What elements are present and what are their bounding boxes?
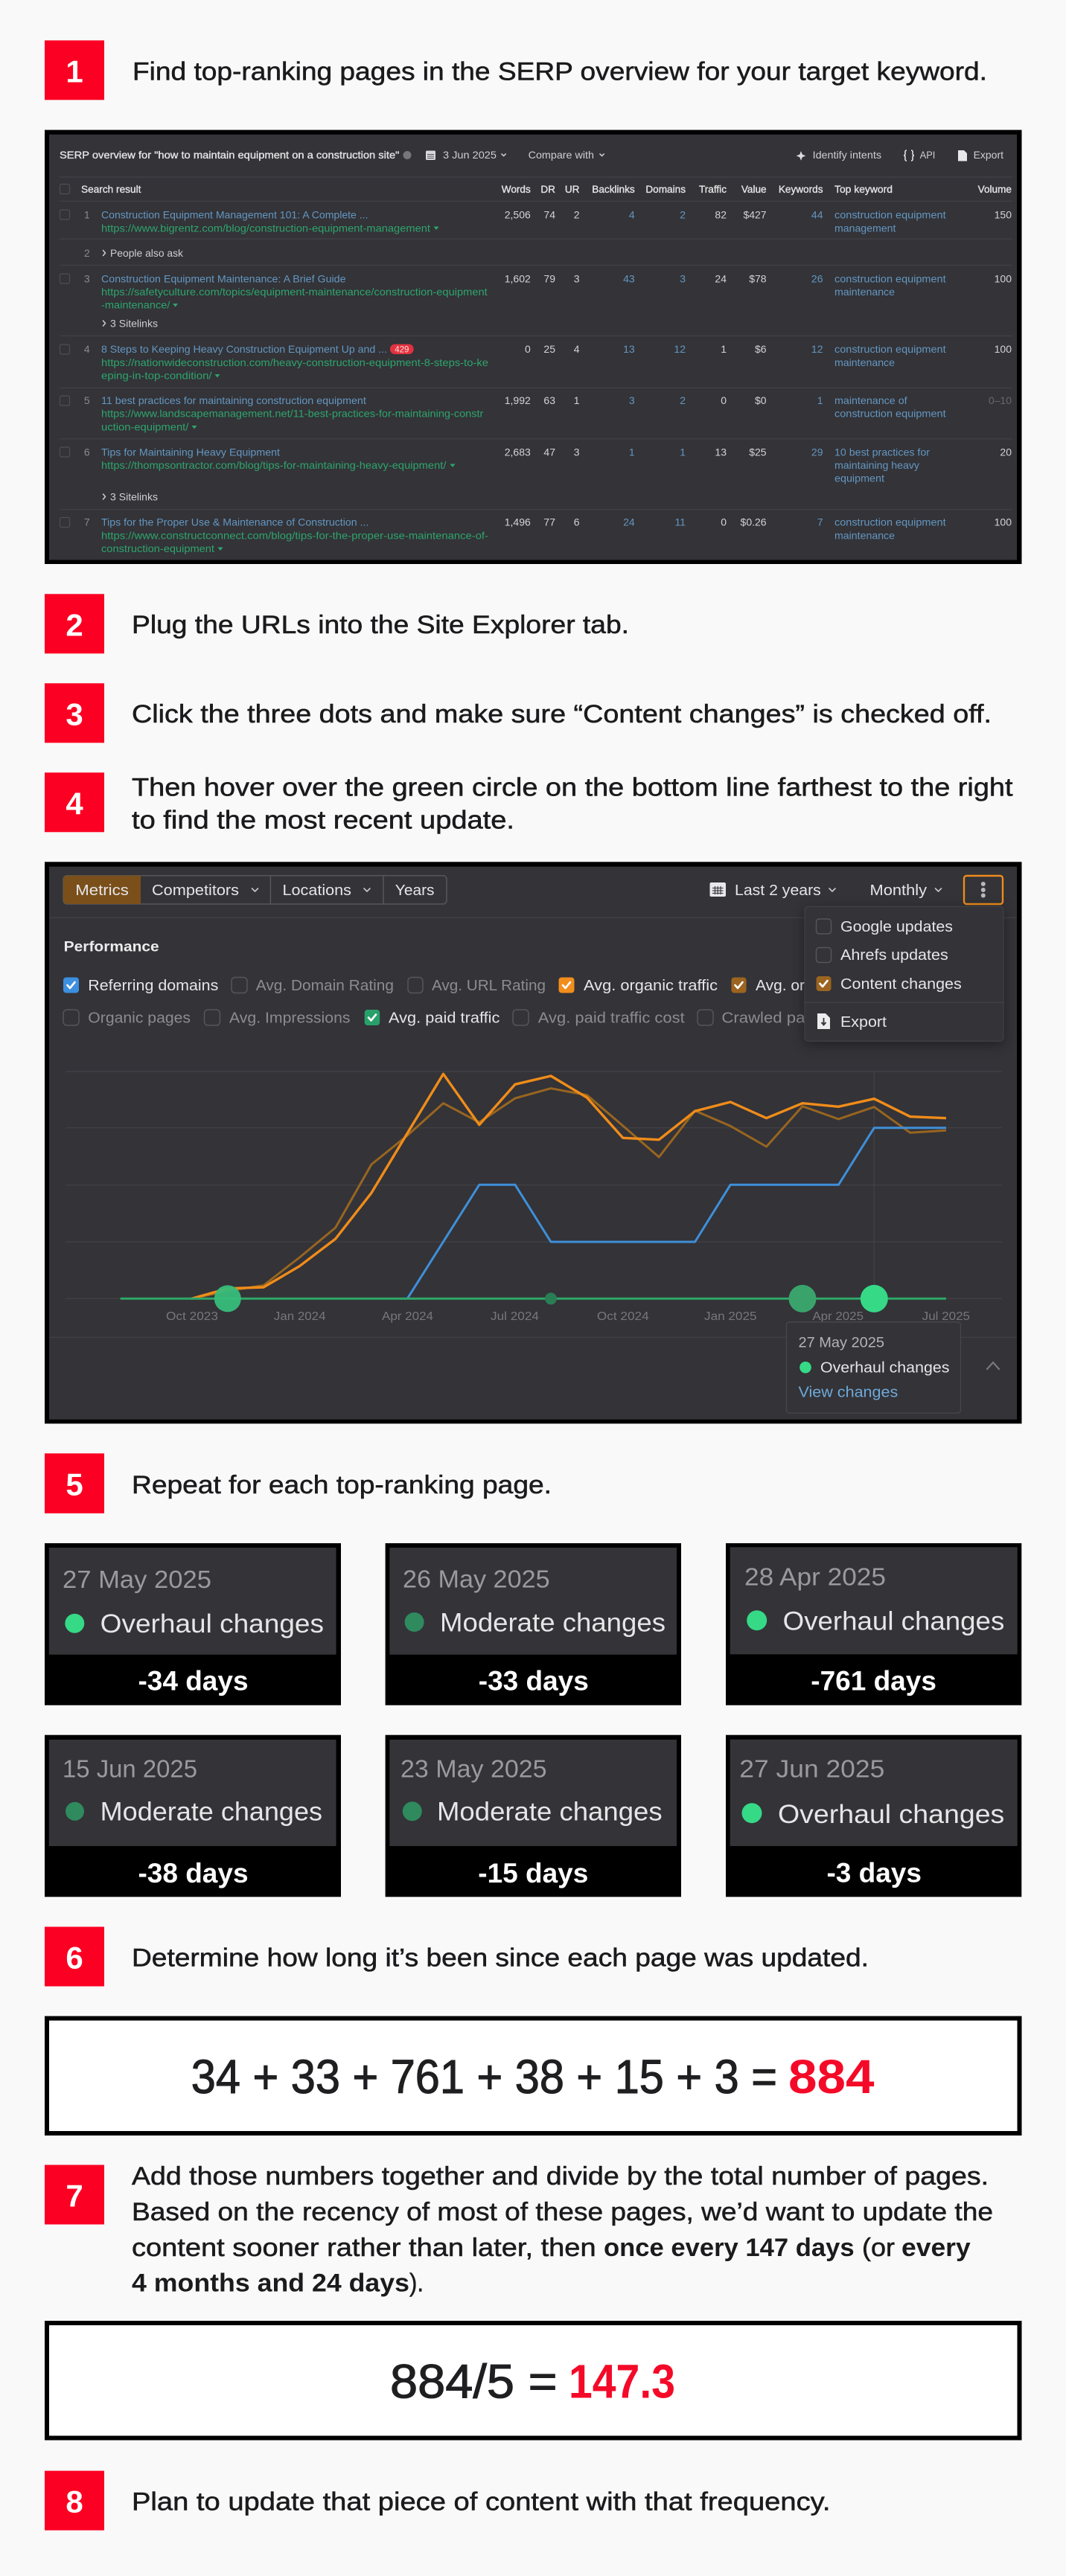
SERP row 3: 43 bbox=[623, 272, 635, 284]
tabs bbox=[63, 876, 447, 904]
equation box: average: 147.3 bbox=[569, 2354, 675, 2408]
card: 27 May 2025 bbox=[45, 1543, 341, 1705]
step 6 bbox=[45, 1927, 869, 1987]
SERP row 7: 0 bbox=[721, 516, 727, 528]
SERP row 3: 3 bbox=[680, 272, 686, 284]
SERP row 4: 0 bbox=[525, 343, 531, 355]
SERP table header: Search result bbox=[81, 183, 141, 195]
equation box: sum of days: 34 + 33 + 761 + 38 + 15 + 3 = bbox=[191, 2050, 777, 2104]
SERP row 3: 3 bbox=[84, 272, 90, 284]
metric checkboxes: Avg. paid traffic bbox=[389, 1010, 500, 1027]
card: 23 May 2025: -15 days bbox=[478, 1858, 588, 1888]
SERP table header: Value bbox=[741, 184, 767, 195]
SERP row 4 bbox=[60, 343, 1012, 382]
metric checkboxes: Avg. Impressions bbox=[229, 1010, 350, 1027]
metric checkboxes: Avg. or bbox=[756, 978, 805, 994]
SERP row 6: 1 bbox=[680, 446, 686, 458]
tabs: Locations bbox=[283, 882, 351, 899]
x axis labels: Oct 2023 bbox=[166, 1310, 218, 1323]
step 4 bbox=[45, 772, 1013, 834]
green line: paid traffic bbox=[121, 1298, 946, 1300]
equation box: average bbox=[47, 2323, 1020, 2438]
step 7 text: every bbox=[901, 2234, 971, 2262]
metric checkboxes: Avg. organic traffic bbox=[584, 978, 718, 994]
SERP table header: Backlinks bbox=[592, 184, 635, 195]
SERP table header bbox=[60, 183, 1012, 195]
SERP row 7: 11 bbox=[674, 516, 686, 528]
SERP row 5: 5 bbox=[84, 394, 90, 406]
orange line: avg organic traffic bbox=[191, 1074, 946, 1298]
SERP row 1 bbox=[60, 208, 1012, 234]
SERP row 6 bbox=[60, 446, 1012, 503]
date range controls: Last 2 years bbox=[735, 882, 821, 899]
Performance heading: Performance bbox=[64, 939, 159, 955]
SERP row 4: 13 bbox=[623, 343, 635, 355]
step 2 number badge: 2 bbox=[66, 607, 83, 642]
SERP row 4: maintenance bbox=[834, 356, 895, 368]
SERP row 4: 429 bbox=[395, 345, 409, 354]
content change markers bbox=[214, 1285, 888, 1313]
panel: SERP overview screenshot bbox=[45, 130, 1021, 564]
SERP row 7: $0.26 bbox=[741, 516, 767, 528]
SERP row 4: $6 bbox=[755, 343, 767, 355]
SERP row 3: -maintenance/ bbox=[101, 299, 170, 311]
SERP row 4: eping-in-top-condition/ bbox=[101, 370, 212, 382]
SERP row 4: 1 bbox=[721, 343, 727, 355]
SERP row 4: 12 bbox=[811, 343, 823, 355]
SERP row 5: 63 bbox=[543, 394, 555, 406]
SERP row 3: 26 bbox=[811, 272, 823, 284]
x axis labels bbox=[166, 1310, 970, 1323]
step 8 number badge: 8 bbox=[66, 2484, 83, 2519]
card: 27 Jun 2025: Overhaul changes bbox=[778, 1800, 1004, 1829]
SERP row 3: 24 bbox=[715, 272, 727, 284]
step 1 bbox=[45, 40, 987, 100]
SERP row 1: construction equipment bbox=[834, 208, 946, 220]
SERP table header: DR bbox=[540, 184, 555, 195]
SERP row 3: Construction Equipment Maintenance: A Brief Guide bbox=[101, 272, 346, 284]
step 6 text: Determine how long it’s been since each page was updated. bbox=[132, 1944, 869, 1972]
SERP row 3: 100 bbox=[995, 272, 1012, 284]
SERP row 5: 3 bbox=[629, 394, 635, 406]
SERP row 1: 4 bbox=[629, 208, 635, 220]
dropdown menu: Google updates bbox=[840, 919, 953, 935]
SERP table header: Traffic bbox=[699, 184, 727, 195]
SERP row 1: 74 bbox=[543, 208, 555, 220]
step 2 bbox=[45, 594, 629, 653]
step 1 number badge bbox=[45, 40, 104, 100]
SERP row 7: 24 bbox=[623, 516, 635, 528]
SERP row 7 bbox=[60, 516, 1012, 554]
card: 28 Apr 2025: Overhaul changes bbox=[783, 1607, 1004, 1636]
three dots button bbox=[964, 876, 1003, 904]
tooltip: 27 May 2025: 27 May 2025 bbox=[798, 1335, 884, 1351]
SERP table header: Top keyword bbox=[834, 183, 893, 195]
SERP table header: Words bbox=[502, 184, 531, 195]
SERP row 5: 2 bbox=[680, 394, 686, 406]
SERP row 7: construction-equipment bbox=[101, 542, 214, 554]
step 1 number badge: 1 bbox=[66, 54, 83, 89]
step 3 number badge: 3 bbox=[66, 696, 83, 731]
card: 15 Jun 2025 bbox=[45, 1735, 341, 1897]
step 7 text: content sooner rather than later, then bbox=[132, 2234, 596, 2262]
step 8 bbox=[45, 2471, 831, 2531]
SERP row 5: 11 best practices for maintaining construction equipment bbox=[101, 394, 366, 406]
SERP row 4: 12 bbox=[674, 343, 686, 355]
step 5 bbox=[45, 1453, 552, 1513]
SERP row 1: Construction Equipment Management 101: A Complete ... bbox=[101, 208, 368, 220]
dropdown menu bbox=[805, 906, 1003, 1041]
step 7 text bbox=[132, 2162, 993, 2298]
SERP row 7: 1,496 bbox=[505, 516, 531, 528]
SERP row 5 bbox=[60, 394, 1012, 432]
SERP row 5: maintenance of bbox=[834, 394, 907, 406]
SERP row 4: 4 bbox=[84, 343, 90, 355]
step 4 number badge: 4 bbox=[66, 786, 83, 821]
metric checkboxes: Avg. Domain Rating bbox=[256, 978, 394, 994]
SERP row 5: $0 bbox=[755, 394, 767, 406]
SERP row 5: 0 bbox=[721, 394, 727, 406]
card: 23 May 2025: 23 May 2025 bbox=[400, 1755, 547, 1782]
SERP row 4: 8 Steps to Keeping Heavy Construction Equipment Up and ... bbox=[101, 343, 387, 355]
step 2 text: Plug the URLs into the Site Explorer tab. bbox=[132, 611, 629, 639]
step 7 number badge bbox=[45, 2165, 104, 2225]
SERP row 6: maintaining heavy bbox=[834, 459, 919, 471]
SERP row 4: https://nationwideconstruction.com/heavy-construction-equipment-8-steps-to-ke bbox=[101, 356, 488, 368]
SERP row 6: 2,683 bbox=[505, 446, 531, 458]
step 5 number badge bbox=[45, 1453, 104, 1513]
SERP row 1: 1 bbox=[84, 208, 90, 220]
SERP row 6: Tips for Maintaining Heavy Equipment bbox=[101, 446, 280, 458]
step 5 number badge: 5 bbox=[66, 1467, 83, 1502]
date range controls bbox=[710, 882, 941, 899]
step 3 text: Click the three dots and make sure “Content changes” is checked off. bbox=[132, 700, 992, 728]
tabs: Years bbox=[395, 882, 435, 899]
blue line: referring domains bbox=[407, 1128, 946, 1298]
SERP row 5: 1 bbox=[817, 394, 823, 406]
SERP row 1: 150 bbox=[995, 208, 1012, 220]
card: 28 Apr 2025: -761 days bbox=[811, 1666, 936, 1696]
SERP row 3: construction equipment bbox=[834, 272, 946, 284]
panel: Site Explorer performance screenshot bbox=[45, 862, 1021, 1423]
dim orange line: avg organic traffic previous bbox=[191, 1089, 946, 1298]
card: 26 May 2025 bbox=[386, 1543, 681, 1705]
step 5 text: Repeat for each top-ranking page. bbox=[132, 1471, 552, 1499]
step 4 text: to find the most recent update. bbox=[132, 806, 514, 834]
card: 26 May 2025: 26 May 2025 bbox=[403, 1565, 550, 1592]
SERP toolbar bbox=[60, 149, 1003, 161]
x axis labels: Oct 2024 bbox=[597, 1310, 649, 1323]
SERP row 7: 7 bbox=[817, 516, 823, 528]
SERP row 1: 2 bbox=[680, 208, 686, 220]
SERP row 4: 4 bbox=[574, 343, 580, 355]
step 2 number badge bbox=[45, 594, 104, 653]
SERP row 2: 2 bbox=[84, 247, 90, 259]
x axis labels: Jan 2025 bbox=[704, 1310, 756, 1323]
dropdown menu: Ahrefs updates bbox=[840, 947, 948, 964]
SERP row 4: construction equipment bbox=[834, 343, 946, 355]
step 6 number badge bbox=[45, 1927, 104, 1987]
SERP table header: UR bbox=[565, 184, 580, 195]
x axis labels: Apr 2024 bbox=[382, 1310, 433, 1323]
SERP row 7: https://www.constructconnect.com/blog/tips-for-the-proper-use-maintenance-of- bbox=[101, 530, 488, 542]
card: 23 May 2025 bbox=[386, 1735, 681, 1897]
dropdown menu: Export bbox=[840, 1014, 887, 1031]
card: 27 May 2025: 27 May 2025 bbox=[63, 1566, 211, 1593]
SERP row 7: 100 bbox=[995, 516, 1012, 528]
SERP row 6: 20 bbox=[1000, 446, 1012, 458]
card: 27 Jun 2025: -3 days bbox=[826, 1857, 922, 1888]
SERP row 7: construction equipment bbox=[834, 516, 946, 528]
metric checkboxes bbox=[63, 978, 805, 1027]
collapse chevron bbox=[987, 1362, 999, 1369]
step 7 text: Add those numbers together and divide by the total number of pages. bbox=[132, 2162, 989, 2191]
SERP row 1: 82 bbox=[715, 208, 727, 220]
step 7 number badge: 7 bbox=[66, 2179, 83, 2213]
equation box: sum of days bbox=[47, 2018, 1020, 2133]
SERP row 7: 6 bbox=[574, 516, 580, 528]
SERP row 1: management bbox=[834, 222, 896, 234]
change cards grid bbox=[45, 1543, 1021, 1897]
SERP row 5: 0–10 bbox=[989, 394, 1012, 406]
step 3 bbox=[45, 683, 992, 743]
metric checkboxes: Referring domains bbox=[88, 978, 218, 994]
SERP row 2: People also ask bbox=[110, 247, 184, 259]
SERP row 6: 29 bbox=[811, 446, 823, 458]
step 6 number badge: 6 bbox=[66, 1941, 83, 1975]
SERP row 6: 6 bbox=[84, 446, 90, 458]
card: 28 Apr 2025 bbox=[726, 1543, 1021, 1705]
SERP row 1: 2,506 bbox=[505, 208, 531, 220]
SERP row 3: maintenance bbox=[834, 286, 895, 298]
SERP row 1: $427 bbox=[743, 208, 767, 220]
SERP row 5: construction equipment bbox=[834, 408, 946, 420]
x axis labels: Jul 2024 bbox=[491, 1310, 539, 1323]
SERP row 7: 77 bbox=[543, 516, 555, 528]
SERP row 6: 3 bbox=[574, 446, 580, 458]
x axis labels: Jan 2024 bbox=[274, 1310, 326, 1323]
card: 15 Jun 2025: -38 days bbox=[138, 1858, 249, 1888]
SERP row 6: equipment bbox=[834, 472, 884, 484]
x axis labels: Jul 2025 bbox=[922, 1310, 970, 1323]
SERP row 1: 2 bbox=[574, 208, 580, 220]
SERP row 6: https://thompsontractor.com/blog/tips-for-maintaining-heavy-equipment/ bbox=[101, 459, 447, 471]
SERP toolbar: 3 Jun 2025 bbox=[443, 149, 497, 161]
tabs: Competitors bbox=[152, 882, 239, 899]
SERP toolbar: Compare with bbox=[529, 149, 594, 161]
SERP row 6: $25 bbox=[749, 446, 767, 458]
step 1 text: Find top-ranking pages in the SERP overview for your target keyword. bbox=[133, 57, 987, 86]
SERP row 6: 1 bbox=[629, 446, 635, 458]
equation box: average: 884/5 = bbox=[390, 2354, 558, 2408]
step 8 text: Plan to update that piece of content with that frequency. bbox=[132, 2488, 831, 2516]
SERP row 1: 44 bbox=[811, 208, 823, 220]
card: 26 May 2025: -33 days bbox=[479, 1666, 589, 1696]
card: 15 Jun 2025: Moderate changes bbox=[100, 1798, 322, 1827]
SERP toolbar: Identify intents bbox=[813, 149, 881, 161]
SERP row 1: https://www.bigrentz.com/blog/construction-equipment-management bbox=[101, 222, 430, 234]
step 8 number badge bbox=[45, 2471, 104, 2531]
SERP row 3 bbox=[60, 272, 1012, 329]
step 7 text: (or bbox=[862, 2234, 895, 2262]
step 7 text: Based on the recency of most of these pages, we’d want to update the bbox=[132, 2198, 993, 2226]
step 3 number badge bbox=[45, 683, 104, 743]
tooltip: 27 May 2025: View changes bbox=[798, 1384, 898, 1400]
SERP row 7: maintenance bbox=[834, 530, 895, 542]
tabs: Metrics bbox=[75, 882, 129, 899]
date range controls: Monthly bbox=[869, 882, 927, 899]
card: 27 May 2025: Overhaul changes bbox=[100, 1609, 324, 1638]
SERP toolbar: API bbox=[920, 149, 935, 161]
step 7 text: 4 months and 24 days bbox=[132, 2269, 409, 2298]
card: 23 May 2025: Moderate changes bbox=[437, 1798, 663, 1827]
tooltip: 27 May 2025: Overhaul changes bbox=[820, 1360, 949, 1377]
metric checkboxes: Crawled pa bbox=[721, 1010, 805, 1027]
SERP toolbar: Export bbox=[974, 149, 1003, 161]
step 7 text: ). bbox=[409, 2269, 424, 2298]
equation box: sum of days: 884 bbox=[788, 2050, 875, 2104]
SERP row 3: 1,602 bbox=[505, 272, 531, 284]
SERP row 3: 3 Sitelinks bbox=[110, 317, 158, 329]
card: 15 Jun 2025: 15 Jun 2025 bbox=[63, 1755, 197, 1782]
card: 27 May 2025: -34 days bbox=[138, 1666, 249, 1696]
dropdown menu: Content changes bbox=[840, 976, 962, 993]
SERP row 7: Tips for the Proper Use & Maintenance of Construction ... bbox=[101, 516, 368, 528]
SERP toolbar: SERP overview for "how to maintain equipment on a construction site" bbox=[60, 149, 399, 161]
tooltip: 27 May 2025 bbox=[786, 1322, 960, 1413]
card: 27 Jun 2025: 27 Jun 2025 bbox=[739, 1755, 884, 1782]
SERP row 6: 13 bbox=[715, 446, 727, 458]
SERP table header: Volume bbox=[978, 184, 1012, 195]
SERP row 3: https://safetyculture.com/topics/equipment-maintenance/construction-equipment bbox=[101, 286, 488, 298]
step 4 text: Then hover over the green circle on the bottom line farthest to the right bbox=[132, 773, 1013, 801]
card: 28 Apr 2025: 28 Apr 2025 bbox=[744, 1563, 886, 1591]
SERP table header: Keywords bbox=[779, 184, 823, 195]
SERP row 5: uction-equipment/ bbox=[101, 420, 189, 432]
SERP row 3: 79 bbox=[543, 272, 555, 284]
step 4 text bbox=[132, 773, 1013, 834]
SERP row 3: $78 bbox=[749, 272, 767, 284]
SERP row 5: https://www.landscapemanagement.net/11-best-practices-for-maintaining-constr bbox=[101, 408, 484, 420]
card: 26 May 2025: Moderate changes bbox=[440, 1609, 666, 1638]
SERP row 3: 3 bbox=[574, 272, 580, 284]
step 4 number badge bbox=[45, 772, 104, 832]
SERP row 6: 3 Sitelinks bbox=[110, 491, 158, 503]
SERP row 4: 25 bbox=[543, 343, 555, 355]
step 7 text: once every 147 days bbox=[604, 2234, 855, 2262]
step 7 bbox=[45, 2162, 993, 2298]
SERP row 4: 100 bbox=[995, 343, 1012, 355]
card: 27 Jun 2025 bbox=[726, 1735, 1021, 1897]
metric checkboxes: Avg. paid traffic cost bbox=[538, 1010, 685, 1027]
SERP row 5: 1,992 bbox=[505, 394, 531, 406]
x axis labels: Apr 2025 bbox=[812, 1310, 864, 1323]
SERP row 6: 47 bbox=[543, 446, 555, 458]
line chart bbox=[49, 1071, 1017, 1337]
metric checkboxes: Organic pages bbox=[88, 1010, 191, 1027]
metric checkboxes: Avg. URL Rating bbox=[432, 978, 546, 994]
SERP row 7: 7 bbox=[84, 516, 90, 528]
SERP row 5: 1 bbox=[574, 394, 580, 406]
SERP row 6: 10 best practices for bbox=[834, 446, 930, 458]
SERP table header: Domains bbox=[645, 184, 686, 195]
